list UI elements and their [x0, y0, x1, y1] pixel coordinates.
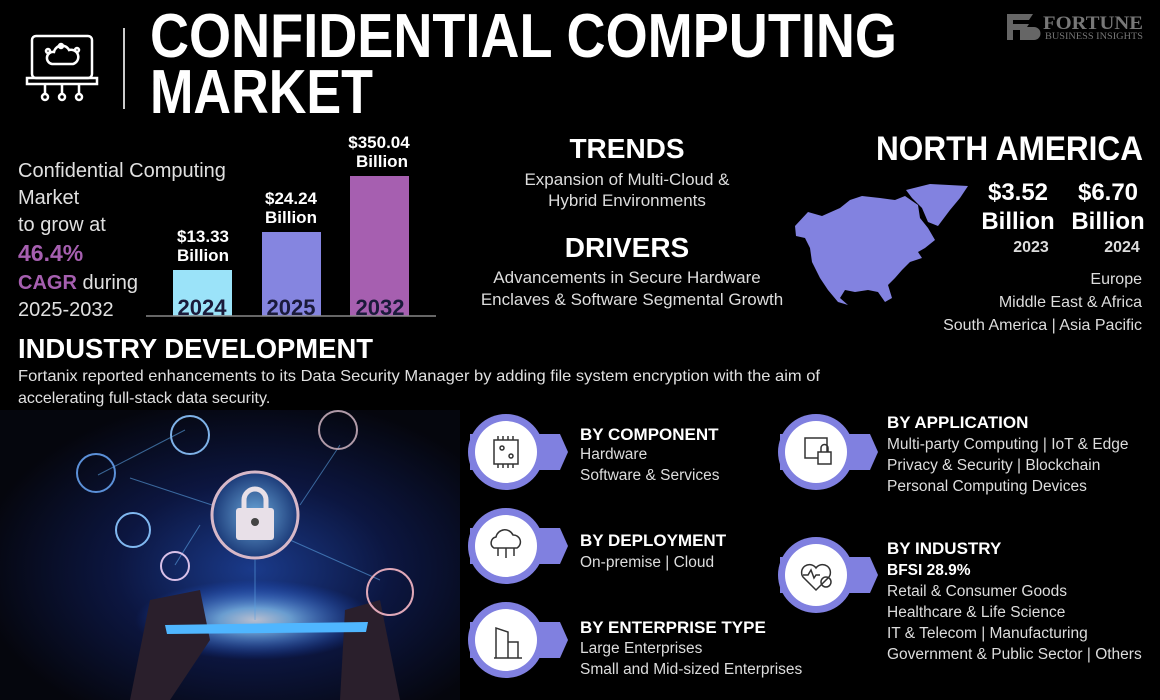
header icon: laptop cloud [27, 36, 97, 100]
segment: by application: Multi-party Computing | IoT & Edge [887, 436, 1129, 453]
segment: by component [468, 414, 720, 490]
title: CONFIDENTIAL COMPUTING [150, 2, 897, 71]
bar chart: 2032 [356, 295, 404, 320]
map: north america [795, 184, 968, 305]
drivers: Advancements in Secure Hardware [493, 268, 761, 287]
bar chart: $350.04 [348, 133, 410, 152]
segment: by component: Hardware [580, 446, 647, 463]
photo: secure tablet [0, 410, 460, 700]
industry development: accelerating full-stack data security. [18, 390, 270, 407]
growth text: 2025-2032 [18, 299, 114, 321]
north america: Europe [1090, 271, 1142, 288]
drivers [481, 232, 783, 309]
segment: by enterprise type: Large Enterprises [580, 640, 703, 657]
growth text: CAGR during [18, 272, 138, 294]
segment: by component: Software & Services [580, 467, 720, 484]
north america: Billion [981, 208, 1055, 235]
title [150, 2, 897, 127]
segment: by industry: IT & Telecom | Manufacturing [887, 625, 1088, 642]
growth text [18, 160, 226, 321]
bar chart: Billion [177, 246, 229, 265]
bar chart [146, 133, 436, 320]
title: MARKET [150, 58, 373, 127]
bar chart: Billion [265, 208, 317, 227]
segment: by industry: Healthcare & Life Science [887, 604, 1065, 621]
segment: by application [778, 413, 1129, 495]
trends: Expansion of Multi-Cloud & [524, 170, 730, 189]
bar chart: $24.24 [265, 189, 318, 208]
segment: by enterprise type: BY ENTERPRISE TYPE [580, 618, 766, 637]
segment: by deployment: BY DEPLOYMENT [580, 531, 727, 550]
north america: Billion [1071, 208, 1145, 235]
industry development: Fortanix reported enhancements to its Data Security Manager by adding file system encryption with the aim of [18, 368, 821, 385]
logo [1007, 13, 1143, 41]
segment: by enterprise type [468, 602, 803, 678]
growth text: Market [18, 187, 80, 209]
north america: 2024 [1104, 239, 1140, 256]
north america: Middle East & Africa [999, 294, 1142, 311]
logo: BUSINESS INSIGHTS [1045, 31, 1143, 41]
growth text: Confidential Computing [18, 160, 226, 182]
trends [524, 133, 730, 210]
segment: by application: BY APPLICATION [887, 413, 1028, 432]
segment: by industry: BY INDUSTRY [887, 539, 1002, 558]
trends: TRENDS [569, 133, 685, 164]
growth text: to grow at [18, 214, 106, 236]
segment: by component: BY COMPONENT [580, 425, 719, 444]
north america: $3.52 [988, 179, 1048, 206]
segment: by deployment: On-premise | Cloud [580, 554, 714, 571]
segment: by deployment [468, 508, 727, 584]
bar chart: 2024 [178, 295, 227, 320]
bar chart: Billion [356, 152, 408, 171]
bar chart: 2025 [267, 295, 315, 320]
segment: by enterprise type: Small and Mid-sized Enterprises [580, 661, 803, 678]
industry development [18, 333, 821, 407]
segment: by application: Personal Computing Devices [887, 478, 1087, 495]
industry development: INDUSTRY DEVELOPMENT [18, 333, 373, 364]
bar chart: $13.33 [177, 227, 229, 246]
trends: Hybrid Environments [548, 191, 706, 210]
segment: by industry: Retail & Consumer Goods [887, 583, 1067, 600]
north america: NORTH AMERICA [876, 130, 1143, 168]
logo: FORTUNE [1043, 13, 1143, 34]
north america [876, 130, 1145, 334]
north america: $6.70 [1078, 179, 1138, 206]
segment: by industry: Government & Public Sector | Others [887, 646, 1142, 663]
north america: 2023 [1013, 239, 1049, 256]
north america: South America | Asia Pacific [943, 317, 1142, 334]
drivers: DRIVERS [565, 232, 689, 263]
segment: by industry [778, 537, 1142, 663]
drivers: Enclaves & Software Segmental Growth [481, 290, 783, 309]
segment: by industry: BFSI 28.9% [887, 562, 971, 579]
segment: by application: Privacy & Security | Blockchain [887, 457, 1100, 474]
growth text: 46.4% [18, 240, 83, 266]
